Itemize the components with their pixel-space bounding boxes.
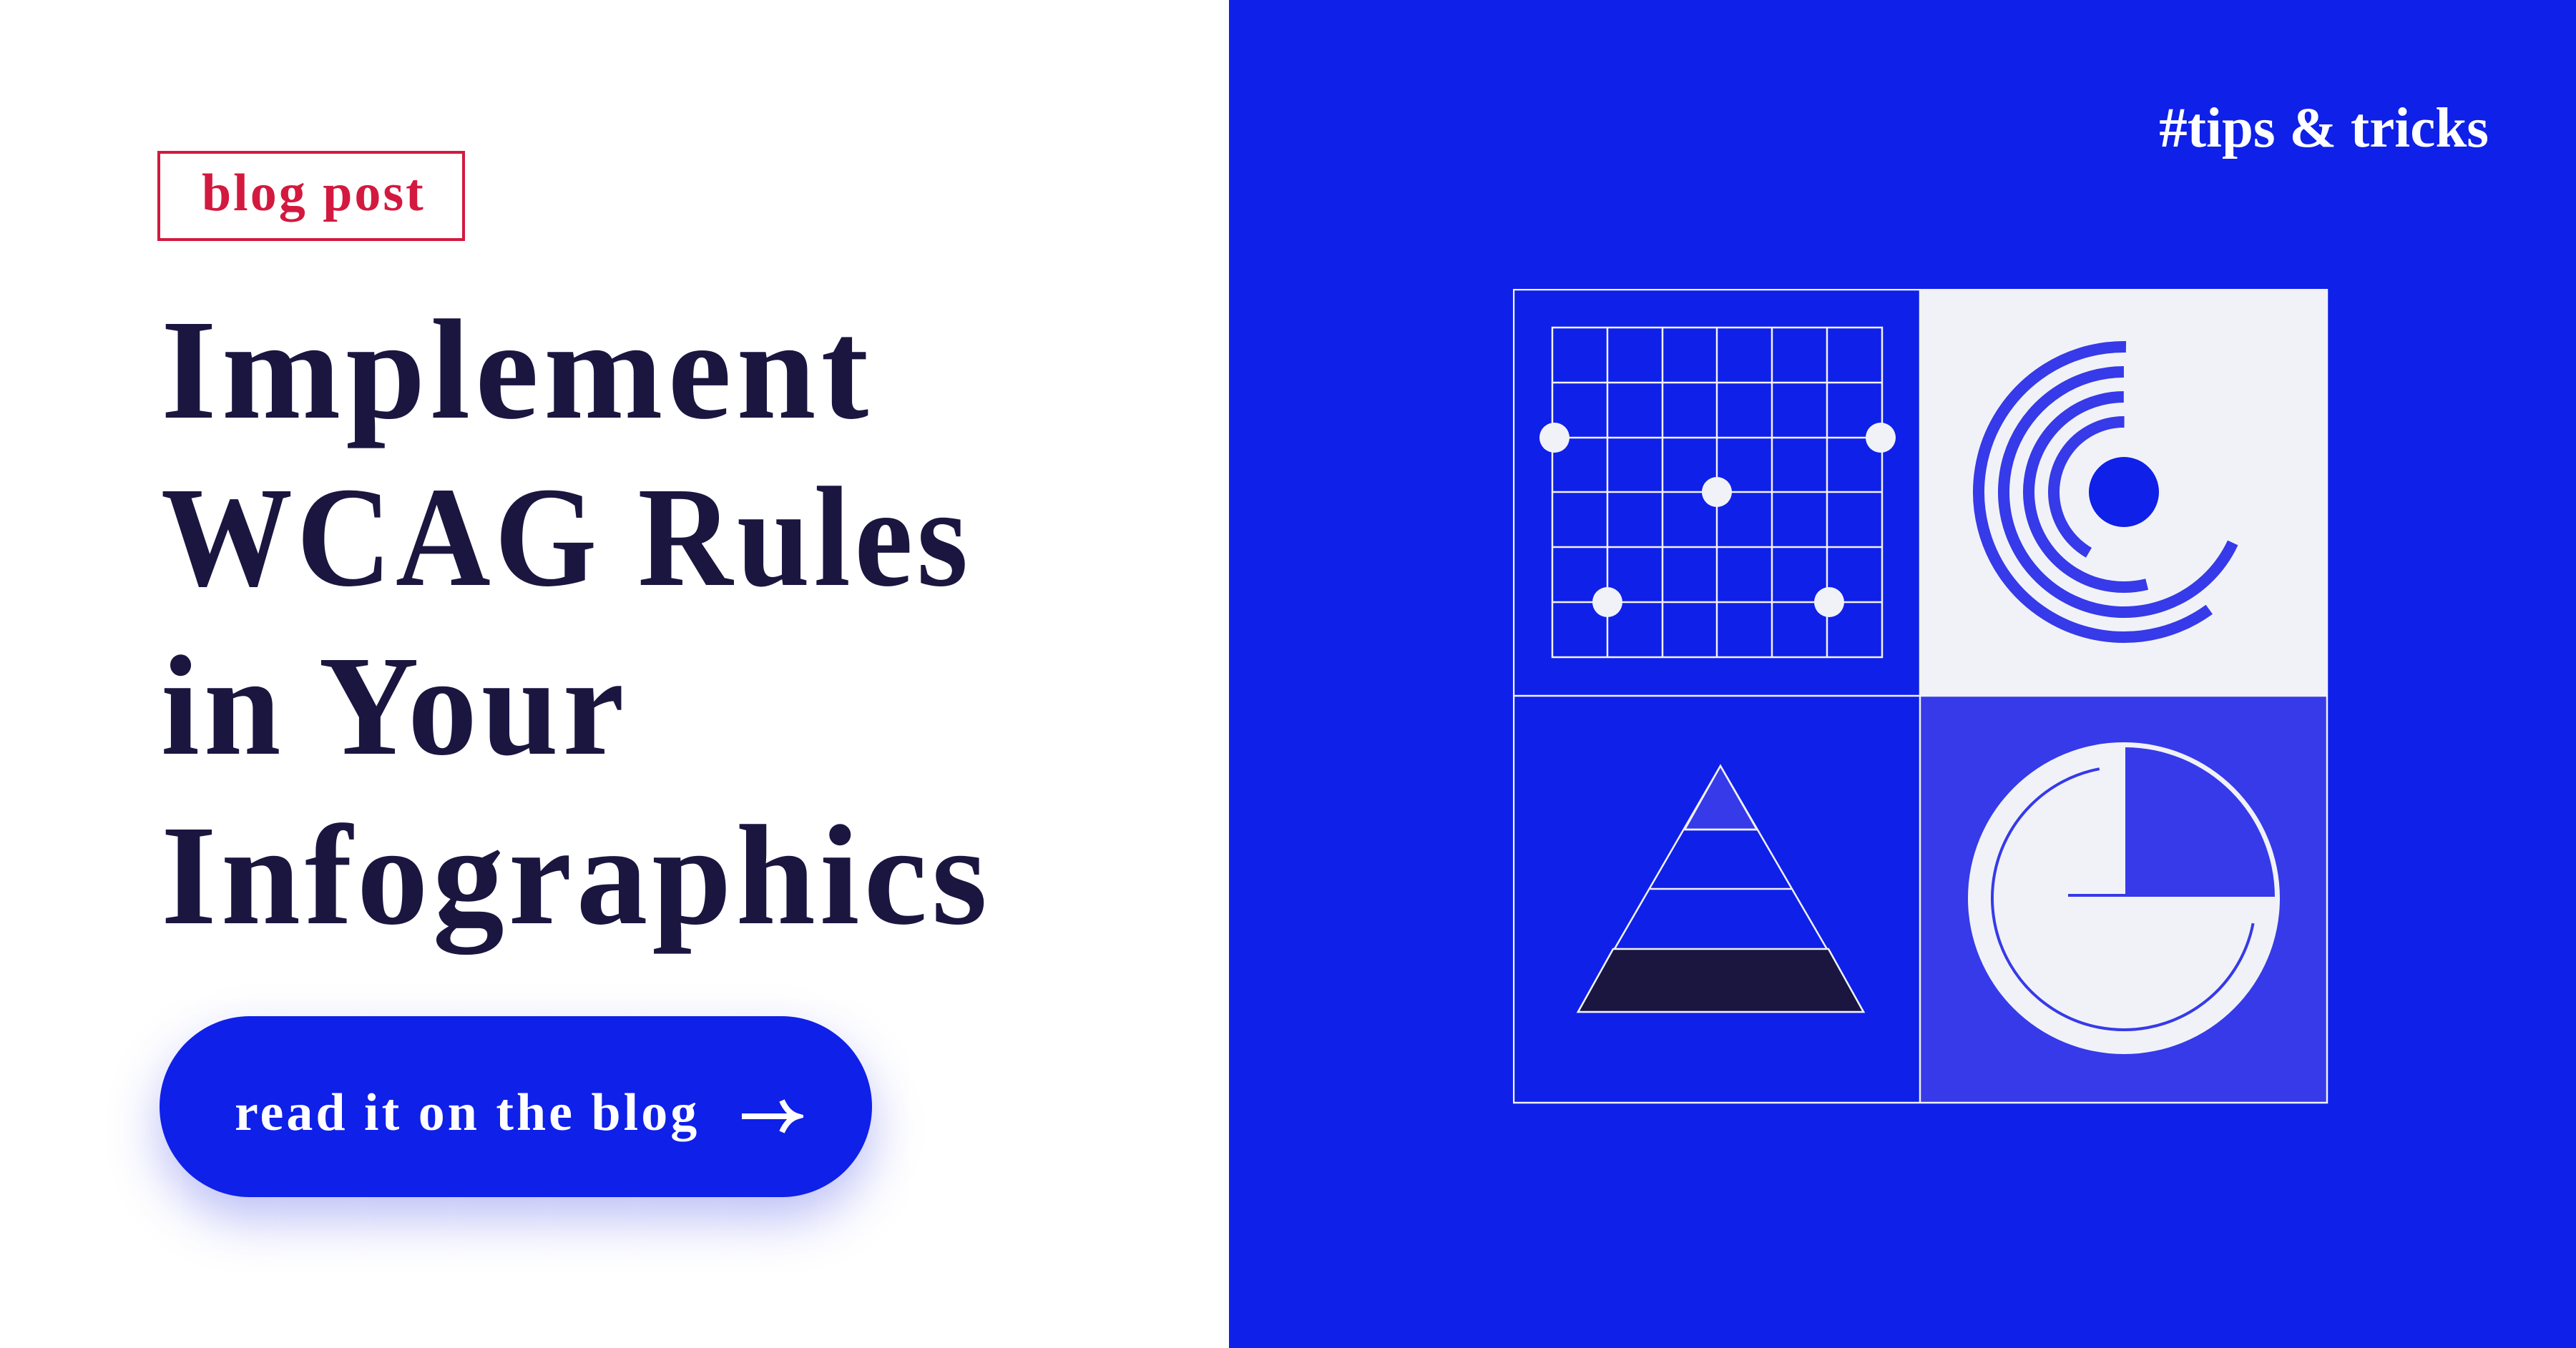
tag: blog post: blog post <box>202 164 426 222</box>
chart: pie <box>1968 742 2280 1054</box>
illustration: chart icons grid <box>1513 289 2328 1104</box>
chart: pyramid <box>1578 766 1864 1012</box>
tag: tips & tricks: #tips & tricks <box>2159 97 2489 159</box>
icon: arrow <box>742 1099 803 1133</box>
quadrant: pie background <box>1920 696 2327 1103</box>
tag: blog post <box>157 151 465 241</box>
quadrant: spiral background <box>1920 289 2327 696</box>
title: WCAG Rules <box>161 458 972 616</box>
title <box>161 291 991 955</box>
panel: blue background <box>1229 0 2576 1348</box>
chart: radial bars <box>1921 289 2327 695</box>
title: Implement <box>161 291 873 449</box>
button: read it on the blog: read it on the blog <box>235 1083 700 1142</box>
title: in Your <box>161 627 628 785</box>
title: Infographics <box>161 797 991 955</box>
chart: scatter grid <box>1539 328 1896 657</box>
button: read it on the blog <box>160 1016 872 1197</box>
